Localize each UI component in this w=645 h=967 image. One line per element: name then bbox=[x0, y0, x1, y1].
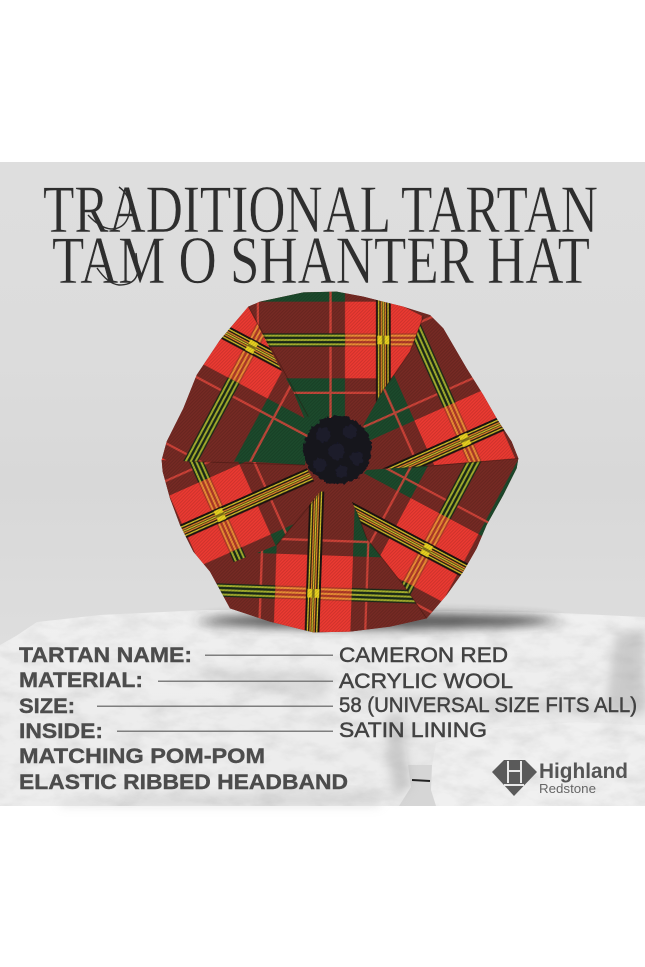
rock crack bbox=[412, 780, 430, 781]
rock slabs bbox=[0, 610, 645, 806]
hat panel: lower right bbox=[347, 458, 518, 618]
feature: pom-pom: MATCHING POM-POM bbox=[19, 745, 265, 768]
logo mark bbox=[492, 760, 537, 796]
woven texture bbox=[162, 292, 518, 632]
hat panel: upper right bbox=[363, 315, 518, 469]
stone plinth bbox=[0, 610, 645, 806]
hat panel: top bbox=[248, 292, 423, 432]
row: inside bbox=[19, 719, 487, 743]
row: tartan name: TARTAN NAME: bbox=[19, 644, 192, 667]
row: tartan name: CAMERON RED bbox=[339, 644, 508, 667]
row: size: 58 (UNIVERSAL SIZE FITS ALL) bbox=[339, 694, 637, 717]
hat shadow bbox=[200, 613, 556, 629]
panel folds bbox=[193, 307, 518, 618]
title swashes bbox=[88, 187, 138, 285]
logo wordmark: Highland bbox=[539, 760, 628, 783]
logo bbox=[492, 760, 628, 796]
row: size bbox=[19, 694, 637, 718]
row: material bbox=[19, 669, 513, 693]
hat panel: lower left bbox=[162, 460, 320, 572]
rock shading bbox=[60, 628, 645, 806]
gap behind rocks bbox=[395, 760, 445, 806]
logo subtitle: Redstone bbox=[539, 781, 596, 796]
hat panel: bottom bbox=[210, 492, 427, 632]
pom-pom bbox=[304, 416, 372, 484]
row: inside: INSIDE: bbox=[19, 720, 103, 743]
tartan hat bbox=[162, 292, 518, 632]
row: inside: SATIN LINING bbox=[339, 719, 487, 742]
feature: headband: ELASTIC RIBBED HEADBAND bbox=[19, 771, 348, 794]
hat base bbox=[162, 292, 518, 632]
specification list bbox=[19, 644, 637, 794]
hat panel: upper left bbox=[162, 307, 310, 465]
row: material: ACRYLIC WOOL bbox=[339, 670, 513, 693]
row: material: MATERIAL: bbox=[19, 669, 143, 692]
row: tartan name bbox=[19, 644, 508, 667]
row: size: SIZE: bbox=[19, 695, 75, 718]
title bbox=[43, 171, 598, 298]
background panel bbox=[0, 162, 645, 806]
